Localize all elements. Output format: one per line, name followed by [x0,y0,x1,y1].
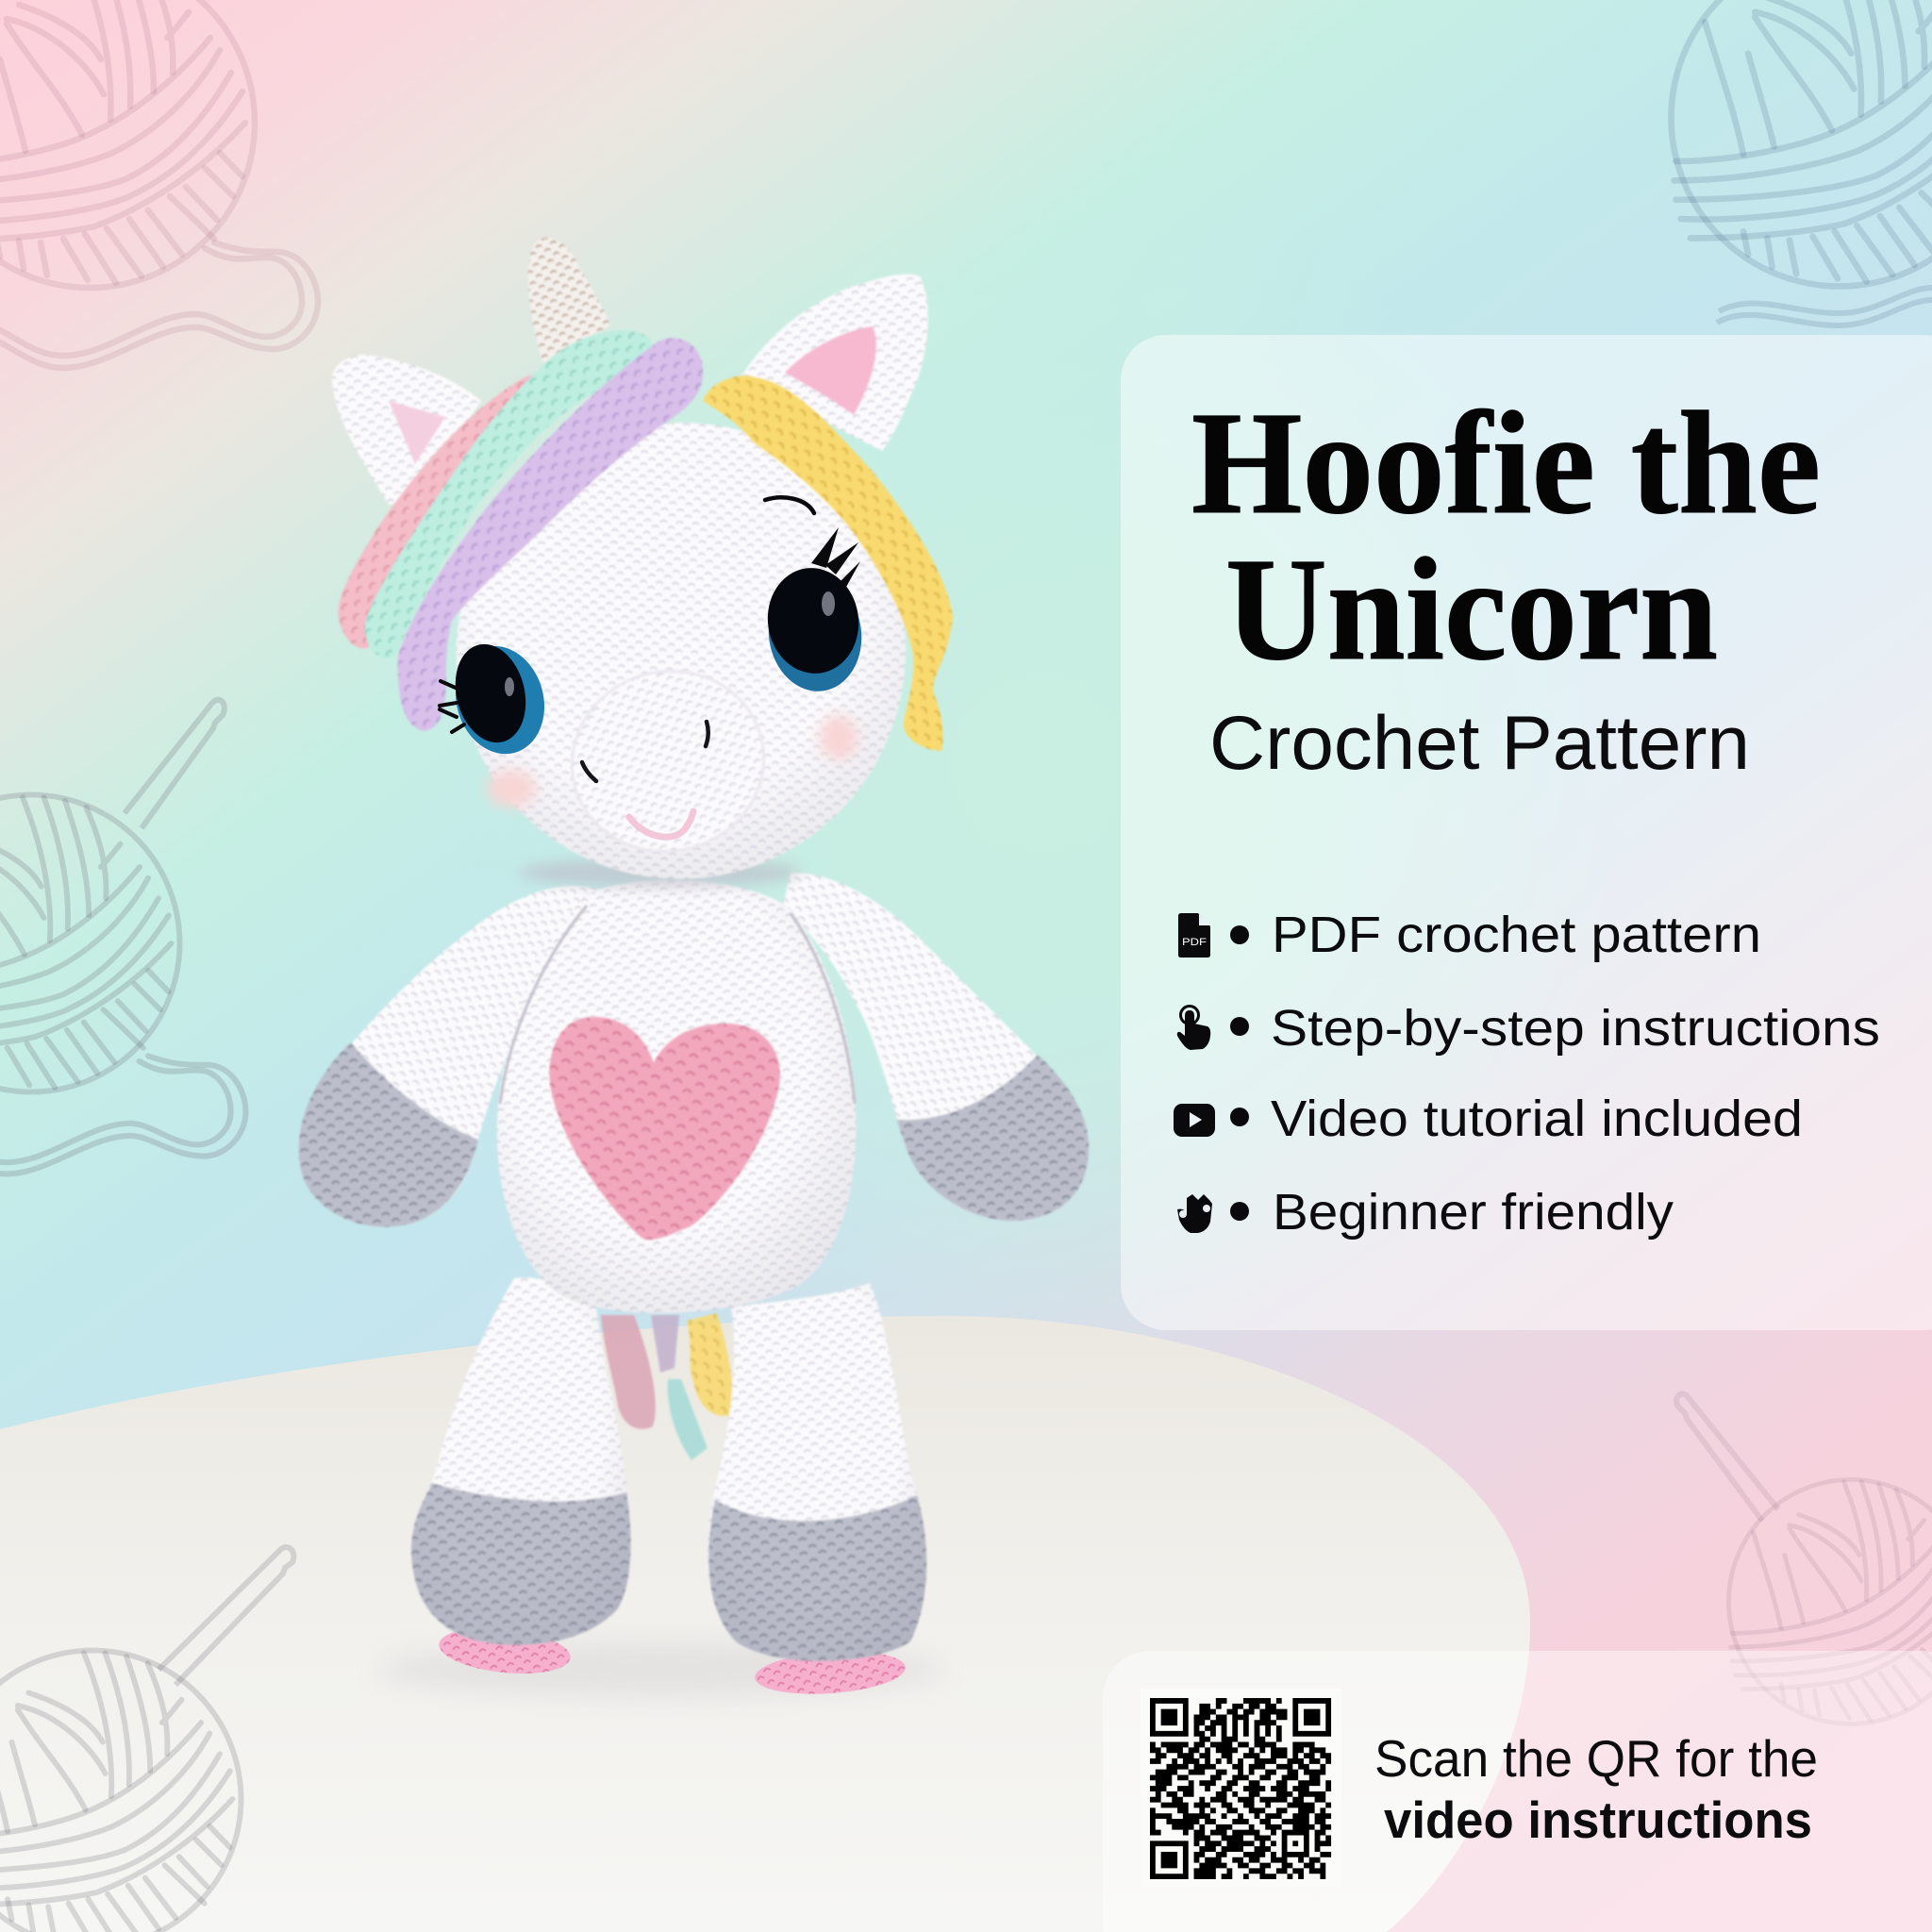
mane strand: yellow [703,375,953,751]
subtitle: Crochet Pattern [1209,701,1750,786]
bullet [1230,1202,1249,1221]
left foot sole [437,1623,573,1679]
mane strand: pink [338,375,557,648]
bullet [1230,1108,1249,1126]
left ear [332,355,481,505]
QR caption line 1: Scan the QR for the [1374,1729,1818,1788]
white round table [0,1316,1530,1932]
icon: tapping hand [1177,1006,1210,1050]
table shadow [377,1641,943,1698]
left leg [411,1277,631,1645]
mint-lilac gap shadow [401,349,660,651]
head [414,381,948,921]
icon: pdf file [1178,913,1210,958]
icon: video play button [1174,1104,1215,1137]
panel: product information [1121,335,1932,1330]
right eye [761,527,869,697]
yarn decoration: top-left ball [0,0,318,368]
right foot sole [754,1646,907,1699]
eyebrow [765,497,814,513]
feature text: beginner: Beginner friendly [1273,1184,1674,1241]
yarn decoration: left ball with hook [0,700,245,1174]
feature list [1174,907,1880,1241]
yarn decoration: top-right ball [1672,0,1932,325]
shadow under head [519,858,802,888]
mane strand: mint [365,330,653,658]
yarn decoration: lower-right ball with hook [1676,1393,1932,1724]
right arm [783,873,1089,1221]
unicorn amigurumi [299,238,1089,1699]
QR code [1141,1689,1341,1887]
left eye [440,636,557,764]
bullet [1230,925,1249,944]
horn [528,238,610,363]
unicorn tail [601,1313,733,1460]
muzzle [552,650,784,873]
icon: pdf file: PDF [1182,937,1207,948]
nostrils [582,722,708,781]
icon: yarn hand [1177,1194,1212,1233]
title line 1: Hoofie the [1191,381,1821,544]
mane strand: lilac [398,338,703,731]
right ear [741,274,928,451]
right cheek blush [820,715,858,760]
feature text: video: Video tutorial included [1271,1091,1803,1147]
QR caption line 2: video instructions [1384,1790,1812,1849]
title line 2: Unicorn [1225,527,1718,691]
feature text: steps: Step-by-step instructions [1271,1000,1880,1057]
panel: QR call to action [1103,1651,1932,1932]
feature text: PDF: PDF crochet pattern [1272,907,1761,963]
torso and arm creases [500,906,855,1104]
mouth [629,811,693,837]
torso [497,880,856,1313]
yarn decoration: bottom-left ball with hook [0,1547,293,1932]
left cheek blush [487,770,536,808]
right leg [708,1283,926,1661]
bullet [1230,1017,1249,1036]
pink heart [549,1017,780,1240]
left arm [299,886,604,1227]
